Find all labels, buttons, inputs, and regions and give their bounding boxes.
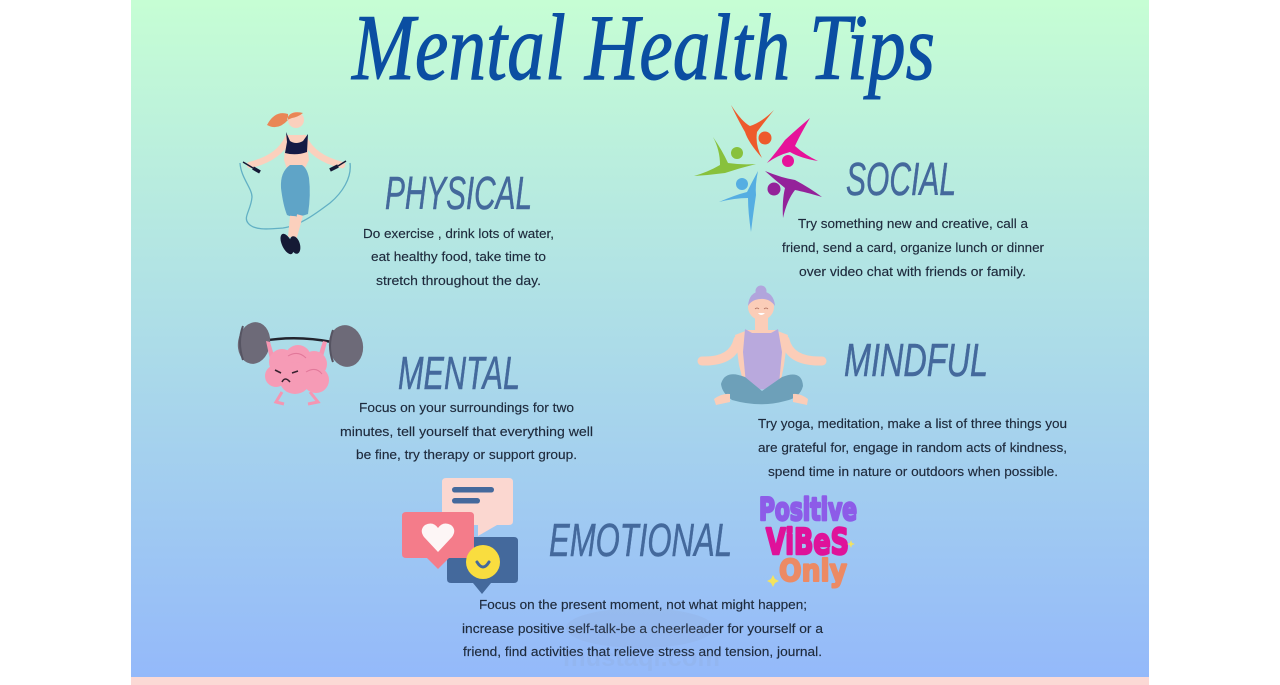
text: physical tips: Do exercise , drink lots of water, xyxy=(363,226,554,241)
heading: physical: PHYSICAL xyxy=(385,167,532,219)
icon: brain lifting barbell xyxy=(235,320,366,404)
heading: emotional: EMOTIONAL xyxy=(549,514,732,566)
text: mental tips: be fine, try therapy or support group. xyxy=(356,447,577,462)
text: mindful tips: Try yoga, meditation, make a list of three things you xyxy=(758,416,1067,431)
text: physical tips: eat healthy food, take time to xyxy=(371,249,546,264)
page background panel xyxy=(131,0,1149,677)
heading: mindful: MINDFUL xyxy=(844,334,988,386)
panel: emotional xyxy=(402,478,857,659)
text: emotional tips: increase positive self-talk-be a cheerleader for yourself or a xyxy=(462,621,824,636)
text: social tips: Try something new and creative, call a xyxy=(798,216,1029,231)
text: physical tips: stretch throughout the day. xyxy=(376,273,541,288)
text: social tips: over video chat with friends or family. xyxy=(799,264,1026,279)
watermark: mustaqi.com xyxy=(563,644,720,672)
text: mental tips: Focus on your surroundings for two xyxy=(359,400,574,415)
icon: woman skipping rope xyxy=(240,112,350,256)
text: mental tips: minutes, tell yourself that everything well xyxy=(340,424,593,439)
sticker: positive vibes only: Only xyxy=(779,554,847,589)
icon: chat bubbles xyxy=(402,478,518,594)
text: emotional tips: Focus on the present moment, not what might happen; xyxy=(479,597,807,612)
heading: mental: MENTAL xyxy=(398,347,520,399)
icon: five colourful figures xyxy=(694,105,822,232)
text: physical tips xyxy=(363,226,554,288)
panel: social xyxy=(694,105,1045,279)
sticker: positive vibes only xyxy=(759,492,857,589)
text: emotional tips: friend, find activities that relieve stress and tension, journal. xyxy=(463,644,822,659)
text: mindful tips: spend time in nature or outdoors when possible. xyxy=(768,464,1058,479)
text: mental tips xyxy=(340,400,593,462)
text: mindful tips: are grateful for, engage in random acts of kindness, xyxy=(758,440,1067,455)
panel: mental xyxy=(235,320,593,462)
sticker: positive vibes only: ViBeS xyxy=(766,522,849,563)
text: social tips: friend, send a card, organize lunch or dinner xyxy=(782,240,1045,255)
watermark xyxy=(563,608,720,672)
panel: physical xyxy=(240,112,554,288)
heading: social: SOCIAL xyxy=(846,153,956,205)
text: social tips xyxy=(782,216,1045,279)
icon: woman meditating xyxy=(702,286,822,405)
bottom pink strip xyxy=(131,677,1149,685)
panel: mindful xyxy=(702,286,1067,479)
sticker: positive vibes only: Positive xyxy=(759,492,857,528)
text: emotional tips xyxy=(462,597,824,659)
text: mindful tips xyxy=(758,416,1067,479)
